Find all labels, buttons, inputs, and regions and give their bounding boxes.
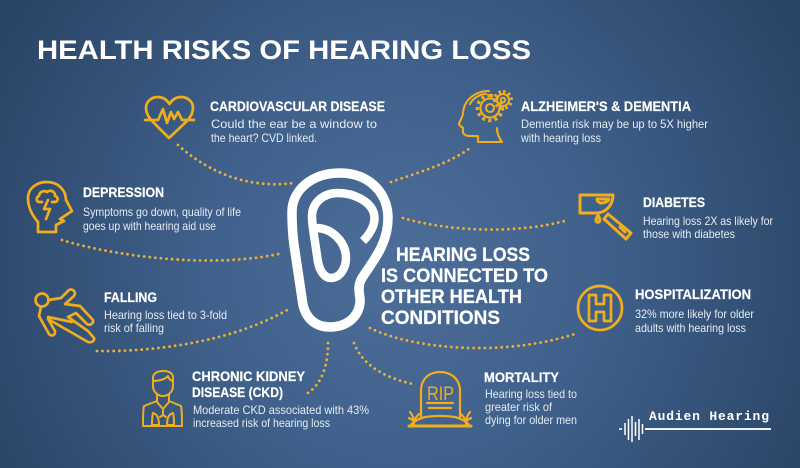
center message: HEARING LOSS bbox=[396, 244, 530, 266]
center message: CONDITIONS bbox=[381, 307, 500, 329]
description: Hearing loss tied to 3-fold bbox=[104, 308, 227, 322]
description: those with diabetes bbox=[643, 227, 735, 241]
description: increased risk of hearing loss bbox=[193, 416, 330, 430]
heading: CHRONIC KIDNEY bbox=[192, 369, 305, 384]
heading bbox=[192, 369, 305, 400]
icon: ear bbox=[292, 173, 388, 327]
title: HEALTH RISKS OF HEARING LOSS bbox=[37, 35, 531, 65]
description bbox=[485, 387, 577, 427]
description: Hearing loss 2X as likely for bbox=[643, 214, 773, 228]
description: 32% more likely for older bbox=[635, 307, 754, 321]
panel: alzheimer's and dementia bbox=[459, 91, 708, 145]
icon: sound wave bbox=[619, 416, 642, 442]
heading: MORTALITY bbox=[484, 370, 559, 385]
description: dying for older men bbox=[485, 413, 577, 427]
logo: Audien Hearing: Audien Hearing bbox=[649, 409, 769, 424]
heading: DISEASE (CKD) bbox=[192, 385, 283, 400]
description bbox=[83, 205, 241, 233]
icon: gravestone bbox=[409, 372, 471, 426]
heading: ALZHEIMER'S & DEMENTIA bbox=[521, 99, 691, 114]
heading: CARDIOVASCULAR DISEASE bbox=[210, 99, 385, 114]
description: adults with hearing loss bbox=[635, 321, 746, 335]
icon: hospital H sign bbox=[578, 286, 622, 330]
description: Dementia risk may be up to 5X higher bbox=[521, 117, 708, 131]
description: goes up with hearing aid use bbox=[83, 219, 216, 233]
icon: head with storm cloud bbox=[28, 182, 72, 232]
panel: depression bbox=[28, 182, 241, 233]
center message bbox=[381, 244, 548, 329]
icon: head with gears bbox=[459, 91, 511, 142]
panel: mortality bbox=[409, 370, 577, 427]
icon: gravestone: RIP bbox=[427, 383, 454, 405]
panel: hospitalization bbox=[578, 286, 754, 335]
dotted connectors bbox=[62, 145, 575, 394]
description: Symptoms go down, quality of life bbox=[83, 205, 241, 219]
description: greater risk of bbox=[485, 400, 553, 414]
panel: diabetes bbox=[580, 195, 773, 241]
description bbox=[643, 214, 773, 241]
icon: heart with pulse bbox=[145, 97, 194, 138]
panel: falling bbox=[36, 289, 227, 342]
description: Could the ear be a window to bbox=[211, 117, 377, 131]
description bbox=[104, 308, 227, 335]
description bbox=[193, 403, 369, 430]
description: with hearing loss bbox=[520, 131, 601, 145]
heading: DEPRESSION bbox=[83, 185, 164, 200]
heading: DIABETES bbox=[643, 195, 705, 210]
description: the heart? CVD linked. bbox=[211, 131, 317, 145]
logo: Audien Hearing bbox=[619, 409, 771, 442]
panel: cardiovascular disease bbox=[145, 97, 385, 145]
description: risk of falling bbox=[104, 321, 164, 335]
icon: falling person bbox=[36, 289, 94, 342]
description bbox=[520, 117, 708, 145]
heading: HOSPITALIZATION bbox=[635, 287, 751, 302]
description: Moderate CKD associated with 43% bbox=[193, 403, 369, 417]
icon: glucose meter and strip bbox=[580, 195, 631, 239]
description: Hearing loss tied to bbox=[485, 387, 577, 401]
center message: OTHER HEALTH bbox=[381, 286, 522, 308]
panel: chronic kidney disease bbox=[143, 369, 369, 430]
description bbox=[635, 307, 754, 335]
center message: IS CONNECTED TO bbox=[381, 265, 548, 287]
heading: FALLING bbox=[104, 290, 157, 305]
icon: person with lungs bbox=[143, 371, 182, 426]
description bbox=[211, 117, 377, 145]
